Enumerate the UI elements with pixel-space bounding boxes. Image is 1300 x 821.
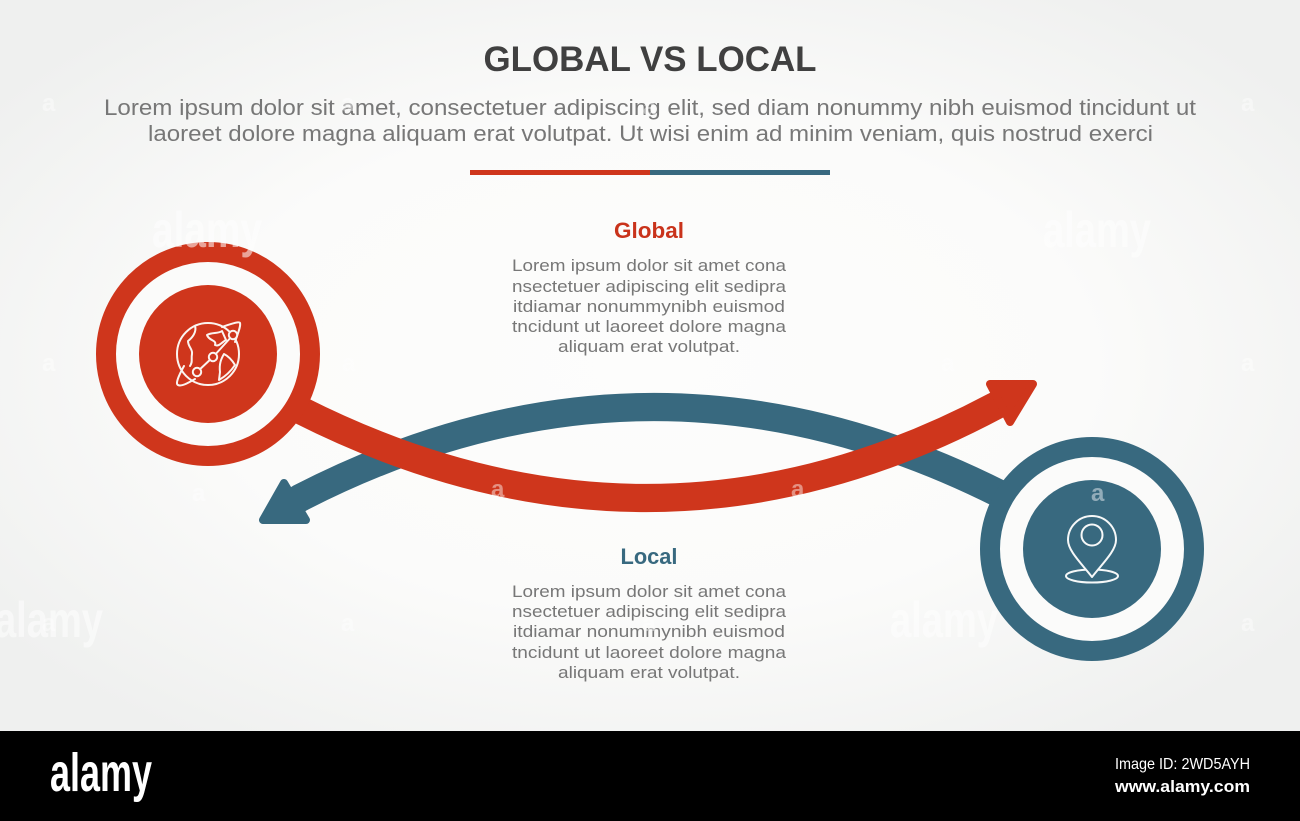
watermark overlay: a xyxy=(342,350,356,377)
text block: global: Lorem ipsum dolor sit amet cona xyxy=(512,257,787,275)
subtitle text block: Lorem ipsum dolor sit amet, consectetuer adipiscing elit, sed diam nonummy nibh euismod tincidunt ut xyxy=(104,95,1196,120)
watermark overlay: a xyxy=(42,90,56,117)
watermark overlay: a xyxy=(1091,480,1105,507)
text block: global: nsectetuer adipiscing elit sedipra xyxy=(512,278,787,296)
watermark overlay: a xyxy=(1241,90,1255,117)
title divider xyxy=(470,170,830,175)
icon: location pin xyxy=(1066,516,1118,582)
text block: local: tncidunt ut laoreet dolore magna xyxy=(512,644,787,662)
heading: local: Local xyxy=(620,544,678,569)
red circle marker xyxy=(106,252,310,456)
blue curved arrow: local xyxy=(263,407,1000,520)
watermark overlay xyxy=(0,90,1255,648)
watermark overlay: a xyxy=(941,350,955,377)
text block: local: itdiamar nonummynibh euismod xyxy=(513,623,785,641)
blue circle marker xyxy=(990,447,1194,651)
website: www.alamy.com xyxy=(1114,777,1250,796)
text block: local: Lorem ipsum dolor sit amet cona xyxy=(512,583,787,601)
footer logo: alamy xyxy=(50,743,152,803)
text block: global: itdiamar nonummynibh euismod xyxy=(513,298,785,316)
watermark overlay: a xyxy=(1241,350,1255,377)
watermark overlay: alamy xyxy=(890,592,998,648)
watermark overlay: a xyxy=(791,476,805,503)
heading: global: Global xyxy=(614,218,684,243)
subtitle text block xyxy=(104,95,1196,146)
text block: global: aliquam erat volutpat. xyxy=(558,338,740,356)
title: GLOBAL VS LOCAL xyxy=(484,40,816,79)
watermark overlay: a xyxy=(491,476,505,503)
watermark overlay: alamy xyxy=(1043,202,1151,258)
text block: local: nsectetuer adipiscing elit sedipra xyxy=(512,603,787,621)
watermark overlay: a xyxy=(1241,610,1255,637)
watermark overlay: a xyxy=(42,610,56,637)
watermark overlay: a xyxy=(341,90,355,117)
watermark overlay: a xyxy=(192,480,206,507)
watermark overlay: a xyxy=(42,350,56,377)
text block: global: tncidunt ut laoreet dolore magna xyxy=(512,318,787,336)
footer bar xyxy=(0,731,1300,821)
text block: local xyxy=(512,544,787,682)
watermark overlay: a xyxy=(642,610,656,637)
image id: Image ID: 2WD5AYH xyxy=(1115,756,1250,773)
text block: global xyxy=(512,218,787,356)
icon: globe with route xyxy=(177,322,240,386)
watermark overlay: alamy xyxy=(152,202,262,258)
text block: local: aliquam erat volutpat. xyxy=(558,664,740,682)
watermark overlay: a xyxy=(643,94,657,121)
watermark overlay: a xyxy=(341,610,355,637)
subtitle text block: laoreet dolore magna aliquam erat volutpat. Ut wisi enim ad minim veniam, quis nostrud exerci xyxy=(148,121,1153,146)
red curved arrow: global xyxy=(300,384,1033,498)
